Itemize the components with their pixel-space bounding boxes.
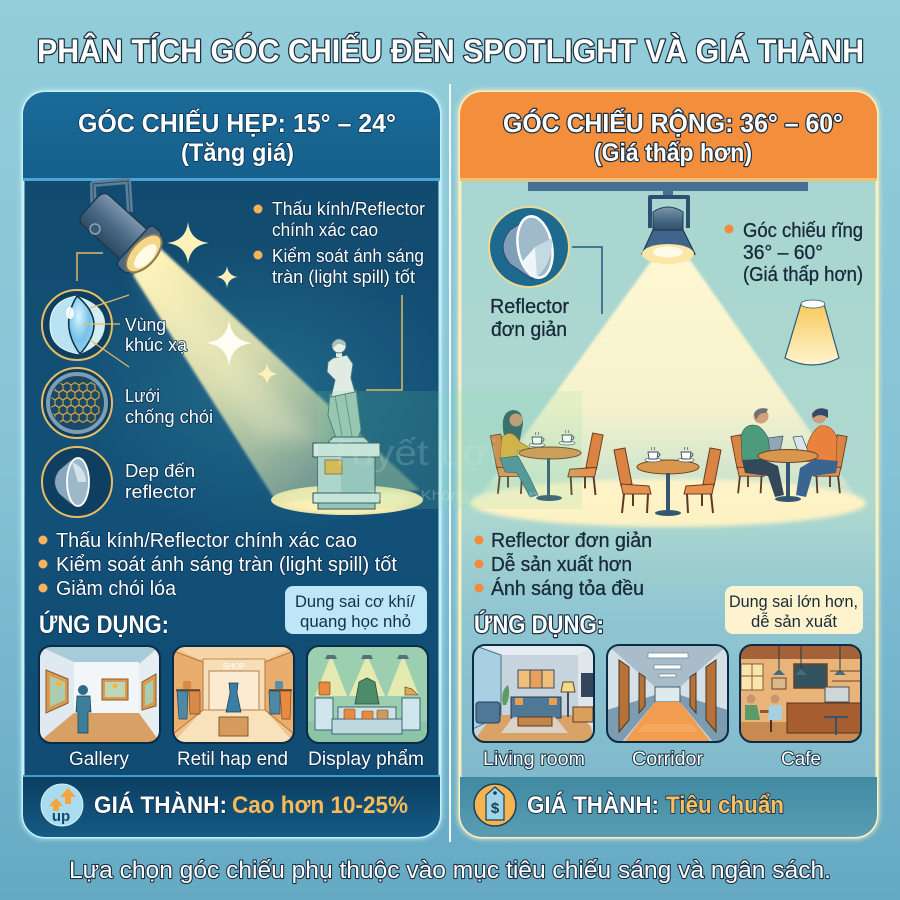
label: refraction zone xyxy=(125,314,188,355)
panel: narrow beam xyxy=(20,89,470,840)
pool of light xyxy=(271,485,423,515)
wide callout text xyxy=(724,220,863,286)
narrow thumbnail captions: Gallery xyxy=(69,748,129,770)
cafe scene: table right xyxy=(731,408,847,502)
wide beam bullet list: Reflector đơn giản xyxy=(491,529,652,552)
label: simple reflector: Reflector xyxy=(490,296,569,318)
watermark: Tuấn - Không gian đẹp xyxy=(368,487,538,503)
wide beam bullet list xyxy=(474,529,652,600)
label: refraction zone: Vùng xyxy=(125,314,166,335)
bracket to statue xyxy=(366,295,402,390)
thumbnail: retail xyxy=(173,646,294,743)
callout: larger tolerance xyxy=(725,586,863,634)
icon: lens xyxy=(42,290,129,367)
wide applications heading: ỨNG DỤNG: xyxy=(474,609,604,639)
callout: larger tolerance: dễ sản xuất xyxy=(751,612,837,631)
callout: small tolerance: quang học nhỏ xyxy=(300,612,411,631)
panel: wide beam xyxy=(457,89,880,840)
wide beam bullet list: Ánh sáng tỏa đều xyxy=(491,577,644,600)
wide thumbnail captions: Corridor xyxy=(632,748,704,770)
wide thumbnail captions xyxy=(483,748,821,770)
label: reflector: Dep đến xyxy=(125,460,195,481)
wide callout text: Góc chiếu rĩng xyxy=(743,220,863,242)
narrow beam bullet list: Thấu kính/Reflector chính xác cao xyxy=(56,529,357,552)
thumbnail: living room xyxy=(473,645,594,742)
title: PHÂN TÍCH GÓC CHIẾU ĐÈN SPOTLIGHT VÀ GIÁ THÀNH xyxy=(37,33,864,69)
callout: small tolerance: Dung sai cơ khí/ xyxy=(295,592,415,611)
sparkles xyxy=(167,222,278,385)
label: anti-glare grid xyxy=(125,385,213,427)
icon: price tag xyxy=(474,784,516,826)
top callout text: Thấu kính/Reflector xyxy=(272,198,425,219)
icon: price up: up xyxy=(52,808,70,825)
narrow header title: GÓC CHIẾU HẸP: 15° – 24° xyxy=(78,108,396,138)
thumbnail: display xyxy=(307,646,428,743)
wide callout text: (Giá thấp hơn) xyxy=(743,264,863,286)
label: anti-glare grid: Lưới xyxy=(125,385,160,406)
footer takeaway: Lựa chọn góc chiếu phụ thuộc vào mục tiêu chiếu sáng và ngân sách. xyxy=(69,857,831,884)
wide beam bullet list: Dễ sản xuất hơn xyxy=(491,553,632,576)
thumbnail: gallery xyxy=(39,646,160,743)
wide header title: GÓC CHIẾU RỘNG: 36° – 60° xyxy=(503,108,843,138)
center divider xyxy=(449,84,451,842)
thumbnail: corridor xyxy=(607,645,728,742)
top callout text: tràn (light spill) tốt xyxy=(272,266,415,287)
icon: honeycomb grid xyxy=(42,368,112,438)
wide light beam xyxy=(474,260,862,505)
cafe scene: table left xyxy=(490,410,603,501)
watermark xyxy=(318,391,582,509)
price bar: wide xyxy=(460,777,877,837)
icon: simple reflector xyxy=(489,207,569,287)
light beam xyxy=(133,248,420,503)
top callout text: Kiểm soát ánh sáng xyxy=(272,245,424,266)
label: simple reflector: đơn giản xyxy=(491,319,567,341)
narrow beam bullet list: Giảm chói lóa xyxy=(56,577,177,600)
label: anti-glare grid: chống chói xyxy=(125,406,213,427)
top callout text: chính xác cao xyxy=(272,219,378,240)
ceiling rail xyxy=(528,182,808,191)
icon: price tag: $ xyxy=(491,800,500,817)
price text: Cao hơn 10-25% xyxy=(232,792,408,819)
connector to beam xyxy=(572,247,602,314)
price text: GIÁ THÀNH: xyxy=(94,791,227,819)
label: reflector: reflector xyxy=(125,481,196,502)
wide callout text: 36° – 60° xyxy=(743,242,823,264)
narrow header band xyxy=(23,92,440,181)
price text xyxy=(94,791,408,819)
callout: larger tolerance: Dung sai lớn hơn, xyxy=(729,592,858,611)
price text: GIÁ THÀNH: xyxy=(527,791,659,819)
price bar: narrow xyxy=(23,775,440,838)
label: refraction zone: khúc xạ xyxy=(125,334,188,355)
watermark: Tuyết Lợi xyxy=(328,432,498,473)
icon: light cone xyxy=(785,300,839,365)
thumbnail: retail: SHOP xyxy=(223,662,245,671)
price text xyxy=(527,791,784,819)
spotlight fixture xyxy=(72,181,171,282)
wide thumbnail captions: Living room xyxy=(483,748,585,770)
connector to lens xyxy=(77,253,103,281)
narrow applications heading: ỨNG DỤNG: xyxy=(39,609,169,639)
narrow beam bullet list xyxy=(38,529,397,600)
cafe scene: table center xyxy=(614,447,721,516)
ceiling fixture xyxy=(642,190,695,264)
label: simple reflector xyxy=(490,296,569,341)
narrow thumbnail captions: Display phẩm xyxy=(308,748,424,770)
wide header subtitle: (Giá thấp hơn) xyxy=(594,139,752,167)
beam glow xyxy=(110,282,440,496)
narrow beam bullet list: Kiểm soát ánh sáng tràn (light spill) tốt xyxy=(56,553,397,576)
top callout text xyxy=(254,198,425,287)
narrow thumbnail captions xyxy=(69,748,424,770)
callout: small tolerance xyxy=(285,586,427,634)
wide header band xyxy=(460,92,877,181)
label: reflector xyxy=(125,460,196,502)
narrow header subtitle: (Tăng giá) xyxy=(181,139,294,167)
narrow thumbnail captions: Retil hap end xyxy=(177,748,288,770)
price text: Tiêu chuẩn xyxy=(666,792,784,819)
icon: reflector xyxy=(42,447,112,517)
light pool on floor xyxy=(470,479,866,527)
wide thumbnail captions: Cafe xyxy=(781,748,821,770)
icon: price up xyxy=(41,784,83,826)
thumbnail: cafe xyxy=(740,645,861,742)
statue on pedestal xyxy=(313,339,380,509)
